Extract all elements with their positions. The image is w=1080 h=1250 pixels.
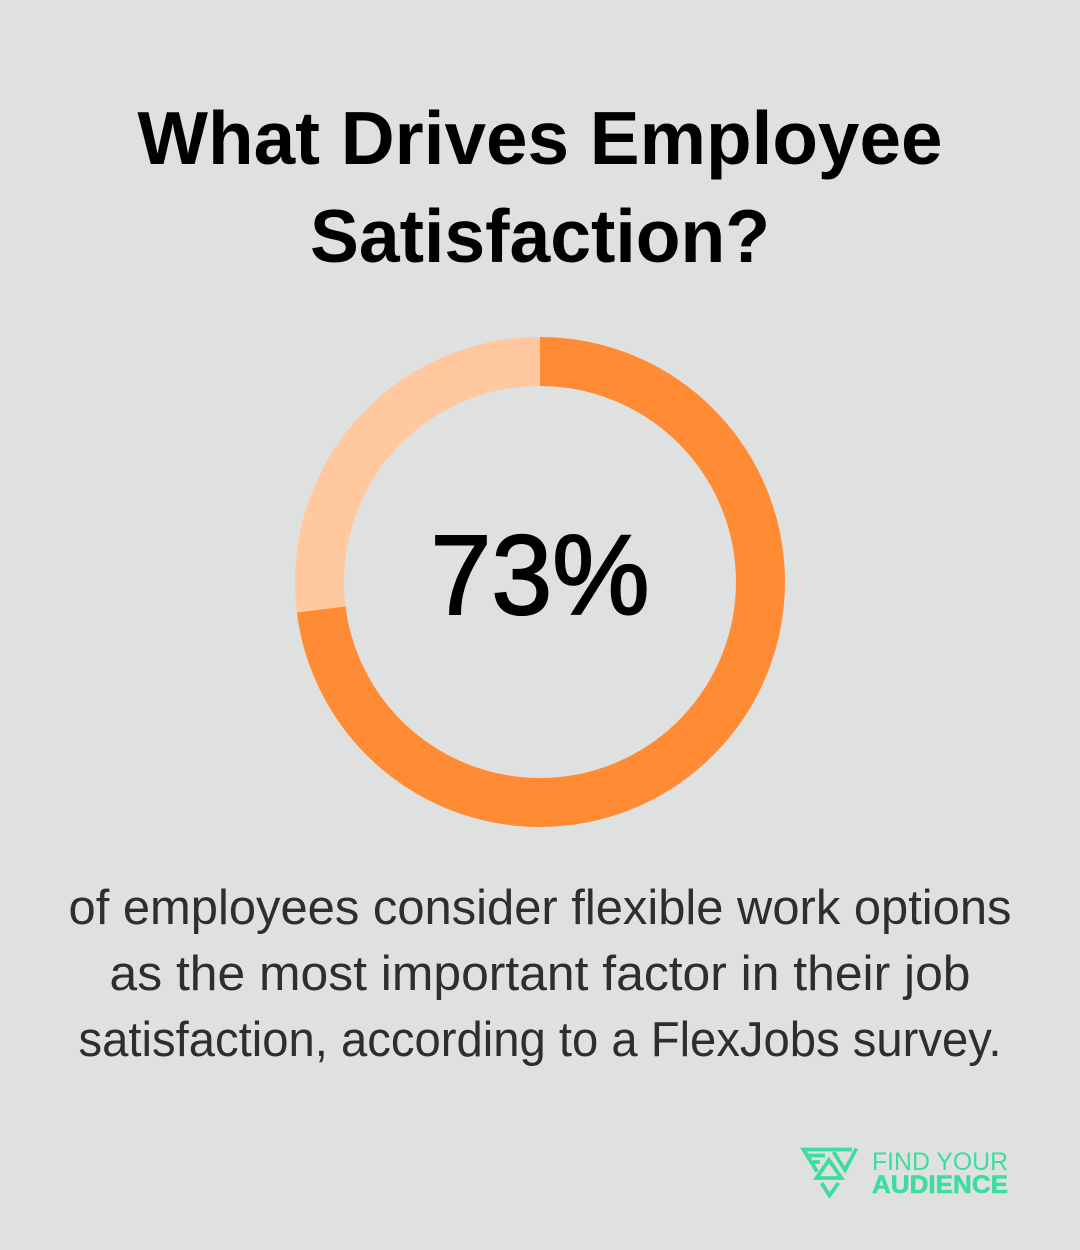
donut value: 73% [430, 512, 650, 638]
logo: Find Your Audience [804, 1148, 1008, 1199]
description text [68, 881, 1012, 1067]
description text: as the most important factor in their job [110, 947, 971, 1001]
description text: of employees consider flexible work options [68, 881, 1012, 935]
description text: satisfaction, according to a FlexJobs survey. [78, 1013, 1002, 1067]
title [138, 96, 942, 278]
donut chart: 73% [320, 362, 760, 802]
title: What Drives Employee [138, 96, 942, 180]
logo text: audience: AUDIENCE [872, 1171, 1008, 1199]
title: Satisfaction? [310, 194, 770, 278]
icon: triangle logo mark [804, 1148, 856, 1196]
logo text: find your: FIND YOUR [872, 1148, 1008, 1176]
